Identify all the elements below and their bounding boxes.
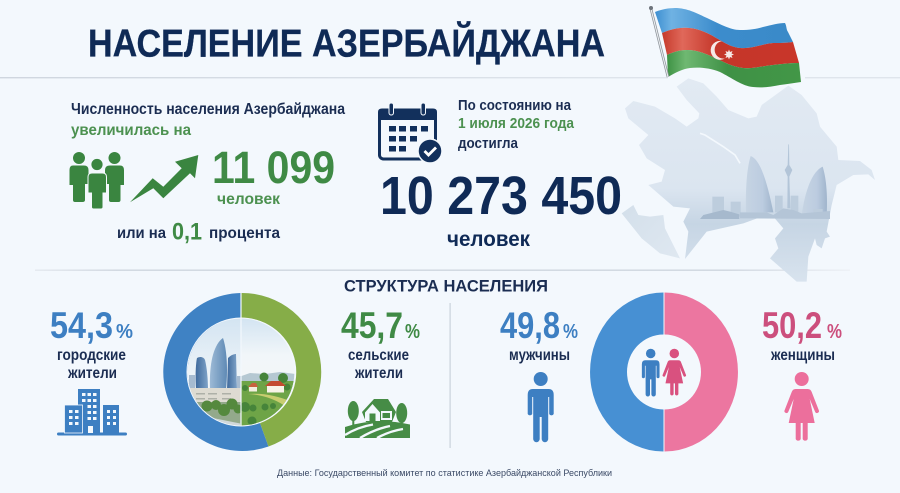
stat: men: % [563,321,578,343]
stat: men: 49,8 [500,305,560,346]
stat: urban: % [116,321,133,343]
number: 10 273 450: 10 273 450 [380,166,622,226]
label: people, navy: человек [447,228,530,251]
donut chart: urban vs rural [163,293,321,451]
text: population increased [71,101,345,139]
icon: city buildings [57,389,127,436]
stat: urban [50,305,133,382]
text: as of 1 July 2026: достигла [458,135,519,152]
text: as of 1 July 2026 [458,97,575,152]
stat: women: 50,2 [762,305,822,346]
stat: women: женщины [770,347,835,364]
map of Azerbaijan with Baku skyline [622,78,875,282]
text: or 0.1 percent: или на [117,225,166,242]
number: 11 099: 11 099 [212,142,335,193]
stat: urban: жители [67,365,117,382]
icon: village house [345,399,410,438]
text: or 0.1 percent: процента [209,225,280,242]
flag of Azerbaijan [649,6,801,87]
text: or 0.1 percent: 0,1 [172,218,202,246]
text: as of 1 July 2026: По состоянию на [458,97,572,114]
text: population increased: увеличилась на [71,122,191,139]
icon: rising arrow [130,155,198,202]
stat: rural: % [405,321,420,343]
icon: group of people [70,152,124,209]
label: people, green: человек [217,191,281,208]
photo: city and village [187,318,296,428]
stat: rural: 45,7 [341,305,403,346]
stat: women: % [827,321,842,343]
icon: man [528,372,554,442]
stat: men: мужчины [509,347,570,364]
icon: crescent [711,41,725,60]
stat: urban: 54,3 [50,305,113,346]
stat: urban: городские [57,347,126,364]
title: НАСЕЛЕНИЕ АЗЕРБАЙДЖАНА [88,20,605,66]
icon: woman small [663,349,686,395]
stat: rural: сельские [348,347,409,364]
icon: man small [642,349,660,397]
text: or 0.1 percent [117,218,280,246]
icon: calendar [378,103,442,163]
stat: rural: жители [354,365,403,382]
donut chart: men vs women [590,292,738,452]
heading: population structure: СТРУКТУРА НАСЕЛЕНИЯ [344,276,548,296]
icon: woman [784,372,819,441]
stat: men [500,305,578,364]
source note: Данные: Государственный комитет по статистике Азербайджанской Республики [277,468,612,479]
text: population increased: Численность населения Азербайджана [71,101,345,118]
text: as of 1 July 2026: 1 июля 2026 года [458,115,575,132]
icon: star [724,50,734,60]
stat: women [762,305,842,364]
divider [450,303,451,448]
stat: rural [341,305,420,382]
